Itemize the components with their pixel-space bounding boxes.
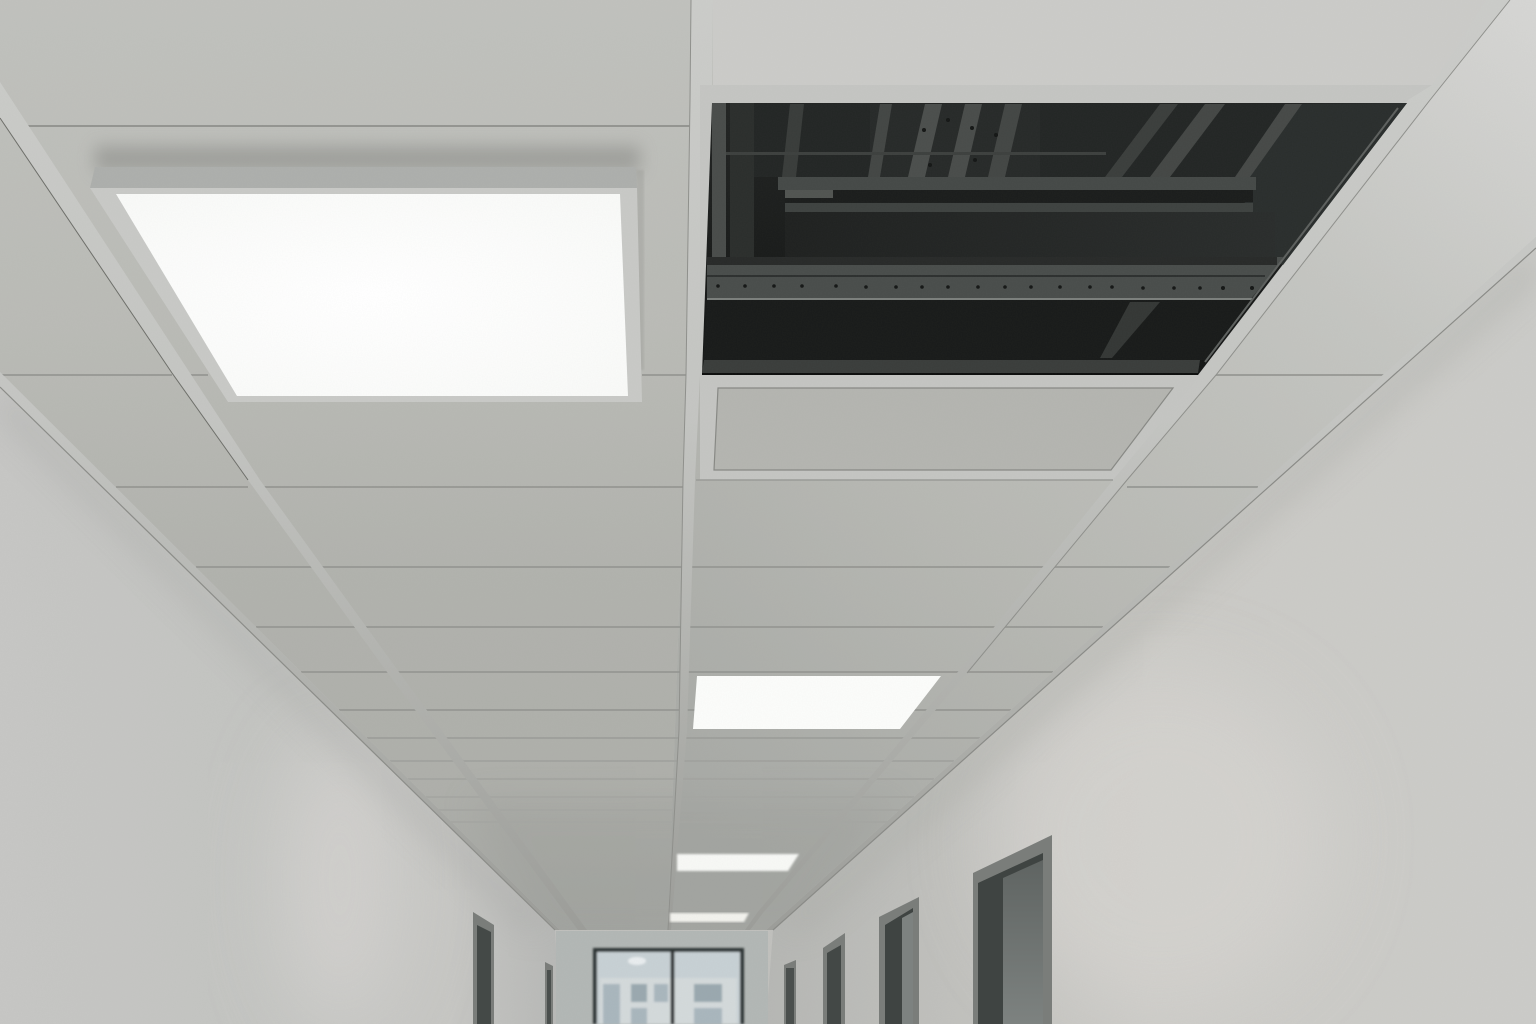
- door left near: [473, 912, 494, 1024]
- left wall bright patch: [294, 776, 380, 984]
- large ceiling light panel: [90, 167, 642, 402]
- door right large: [973, 835, 1052, 1024]
- right wall: [760, 240, 1536, 1024]
- farthest ceiling light: [670, 913, 749, 922]
- far end wall with window: [556, 931, 768, 1024]
- upper duct and brackets: [712, 103, 1407, 265]
- left wall edge trim: [0, 372, 560, 930]
- opening frame: [700, 85, 1432, 480]
- left diagonal ceiling bar: [0, 82, 587, 930]
- shadow right of large light: [636, 170, 644, 370]
- right diagonal bar edge line: [967, 0, 1510, 673]
- door right fourth: [784, 960, 796, 1024]
- centre ceiling bar: [668, 0, 713, 930]
- left wall shadow under ceiling: [314, 702, 451, 850]
- far ceiling light: [677, 854, 799, 871]
- left wall: [260, 751, 556, 1024]
- pipe: [778, 177, 1256, 212]
- window glass and outside view: [593, 948, 744, 1024]
- centre bar edge line: [668, 0, 691, 930]
- replaced ceiling tile below opening: [714, 388, 1173, 470]
- upper ceiling tile above opening: [713, 0, 1486, 85]
- right wall edge line: [773, 248, 1536, 930]
- lower void and rail: [702, 300, 1250, 375]
- door left far: [545, 962, 553, 1024]
- void inner frame edge: [1205, 108, 1398, 362]
- steel rail with holes: [707, 257, 1283, 300]
- shadow above large light: [95, 146, 640, 172]
- right diagonal ceiling bar: [745, 0, 1510, 930]
- door right second: [879, 897, 919, 1024]
- ceiling plane, right of centre bar: [668, 0, 1536, 930]
- left wall edge line: [0, 387, 555, 930]
- tile frame lower edge: [696, 479, 1113, 481]
- left diagonal bar shadow line: [0, 118, 248, 480]
- right wall edge trim: [766, 237, 1536, 930]
- door right third: [823, 933, 845, 1024]
- far ceiling darkening: [470, 800, 900, 940]
- ceiling plane, left of centre bar: [0, 0, 700, 930]
- open ceiling void: [702, 103, 1407, 375]
- right wall shadow under ceiling: [986, 271, 1528, 758]
- ceiling grid lines: [0, 126, 1387, 822]
- right wall bright patch: [1008, 721, 1150, 956]
- round duct: [785, 212, 1275, 257]
- middle ceiling light: [693, 676, 941, 729]
